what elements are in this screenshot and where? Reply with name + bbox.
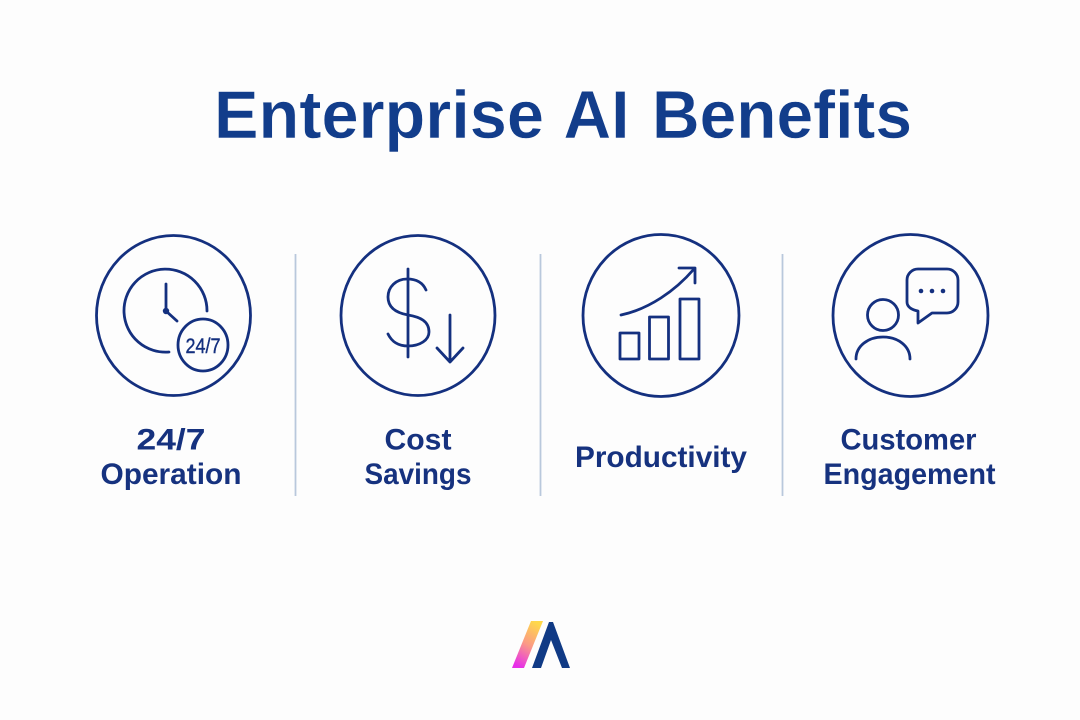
label: Cost Savings: Savings — [364, 458, 472, 491]
label: 24/7 Operation — [100, 424, 242, 491]
label: 24/7 Operation: 24/7 — [136, 424, 206, 456]
icon: dollar with down arrow — [341, 236, 495, 396]
icon: clock with 24/7 badge — [96, 236, 250, 396]
label: Cost Savings: Cost — [384, 424, 452, 456]
icon: clock with 24/7 badge: 24/7 — [186, 335, 220, 358]
label: Productivity: Productivity — [575, 441, 747, 474]
icon: person with speech bubble — [833, 234, 988, 396]
title: Enterprise — [214, 77, 544, 153]
logo — [512, 621, 570, 668]
icon: bar chart with rising arrow — [583, 234, 739, 396]
panel: customer engagement — [824, 234, 996, 491]
title: Benefits — [652, 77, 912, 153]
panel: 24/7 operation — [96, 236, 250, 491]
label: Cost Savings — [364, 424, 472, 491]
title: AI — [564, 77, 630, 153]
label: Customer Engagement — [824, 424, 996, 491]
label: Customer Engagement: Customer — [840, 424, 977, 456]
label: 24/7 Operation: Operation — [100, 458, 242, 491]
panel: cost savings — [341, 236, 495, 491]
title — [214, 77, 912, 153]
panel: productivity — [575, 234, 747, 474]
label: Customer Engagement: Engagement — [824, 458, 996, 491]
